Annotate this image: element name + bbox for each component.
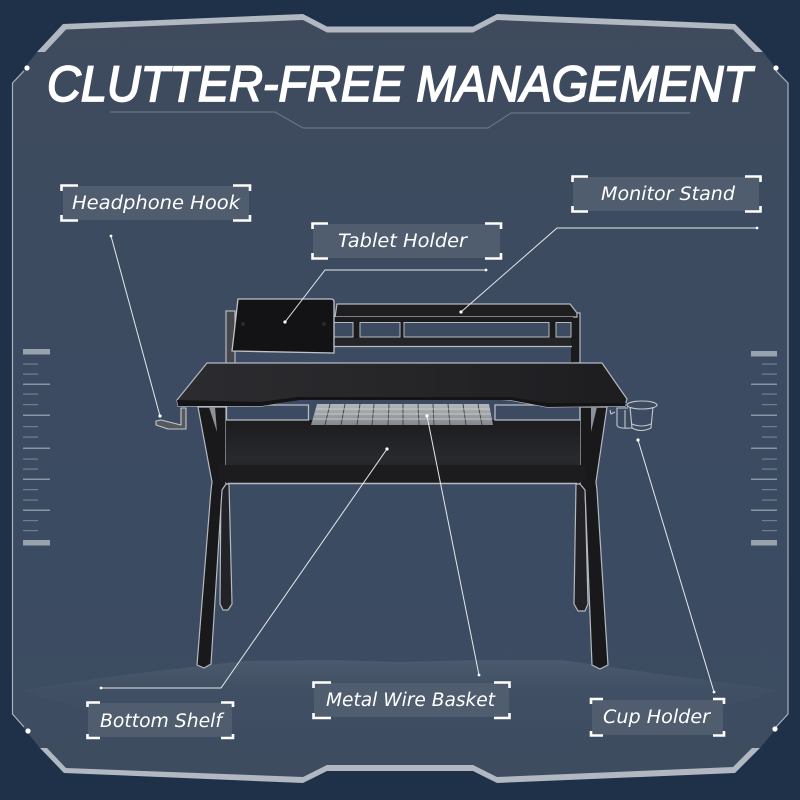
label: Headphone Hook (62, 186, 250, 220)
under-desk windows (226, 405, 580, 420)
leader: bottom shelf (100, 447, 389, 689)
label: Metal Wire Basket (314, 682, 510, 718)
title: CLUTTER-FREE MANAGEMENT (47, 56, 755, 112)
icon: metal wire basket (311, 404, 493, 425)
label: Headphone Hook: Headphone Hook (72, 193, 241, 214)
leader: cup holder (636, 438, 715, 693)
rear legs (220, 484, 588, 611)
desk illustration (156, 299, 657, 669)
leg highlight slivers (209, 407, 597, 432)
icon: headphone hook (156, 408, 186, 429)
right scale ornament (751, 351, 777, 546)
leader: metal wire basket (425, 414, 480, 676)
label: Cup Holder: Cup Holder (603, 707, 711, 728)
label: Bottom Shelf: Bottom Shelf (100, 711, 225, 732)
front legs (197, 407, 608, 669)
monitor stand (333, 304, 580, 363)
bottom shelf and back panel (219, 420, 586, 484)
leader: monitor stand (459, 227, 758, 314)
leader: headphone hook (110, 235, 162, 418)
desktop surface (177, 363, 627, 407)
label: Bottom Shelf (88, 702, 233, 738)
label: Tablet Holder: Tablet Holder (338, 231, 468, 252)
label: Metal Wire Basket: Metal Wire Basket (326, 690, 496, 711)
left scale ornament (23, 349, 50, 546)
icon: cup holder (610, 401, 657, 430)
tablet holder (232, 299, 334, 353)
label: Cup Holder (591, 699, 724, 736)
label: Monitor Stand (572, 176, 760, 212)
label: Monitor Stand: Monitor Stand (601, 184, 735, 205)
label: Tablet Holder (312, 224, 501, 258)
title underline ornament (110, 112, 690, 128)
left upright post (226, 311, 235, 364)
leader: tablet holder (283, 269, 487, 324)
